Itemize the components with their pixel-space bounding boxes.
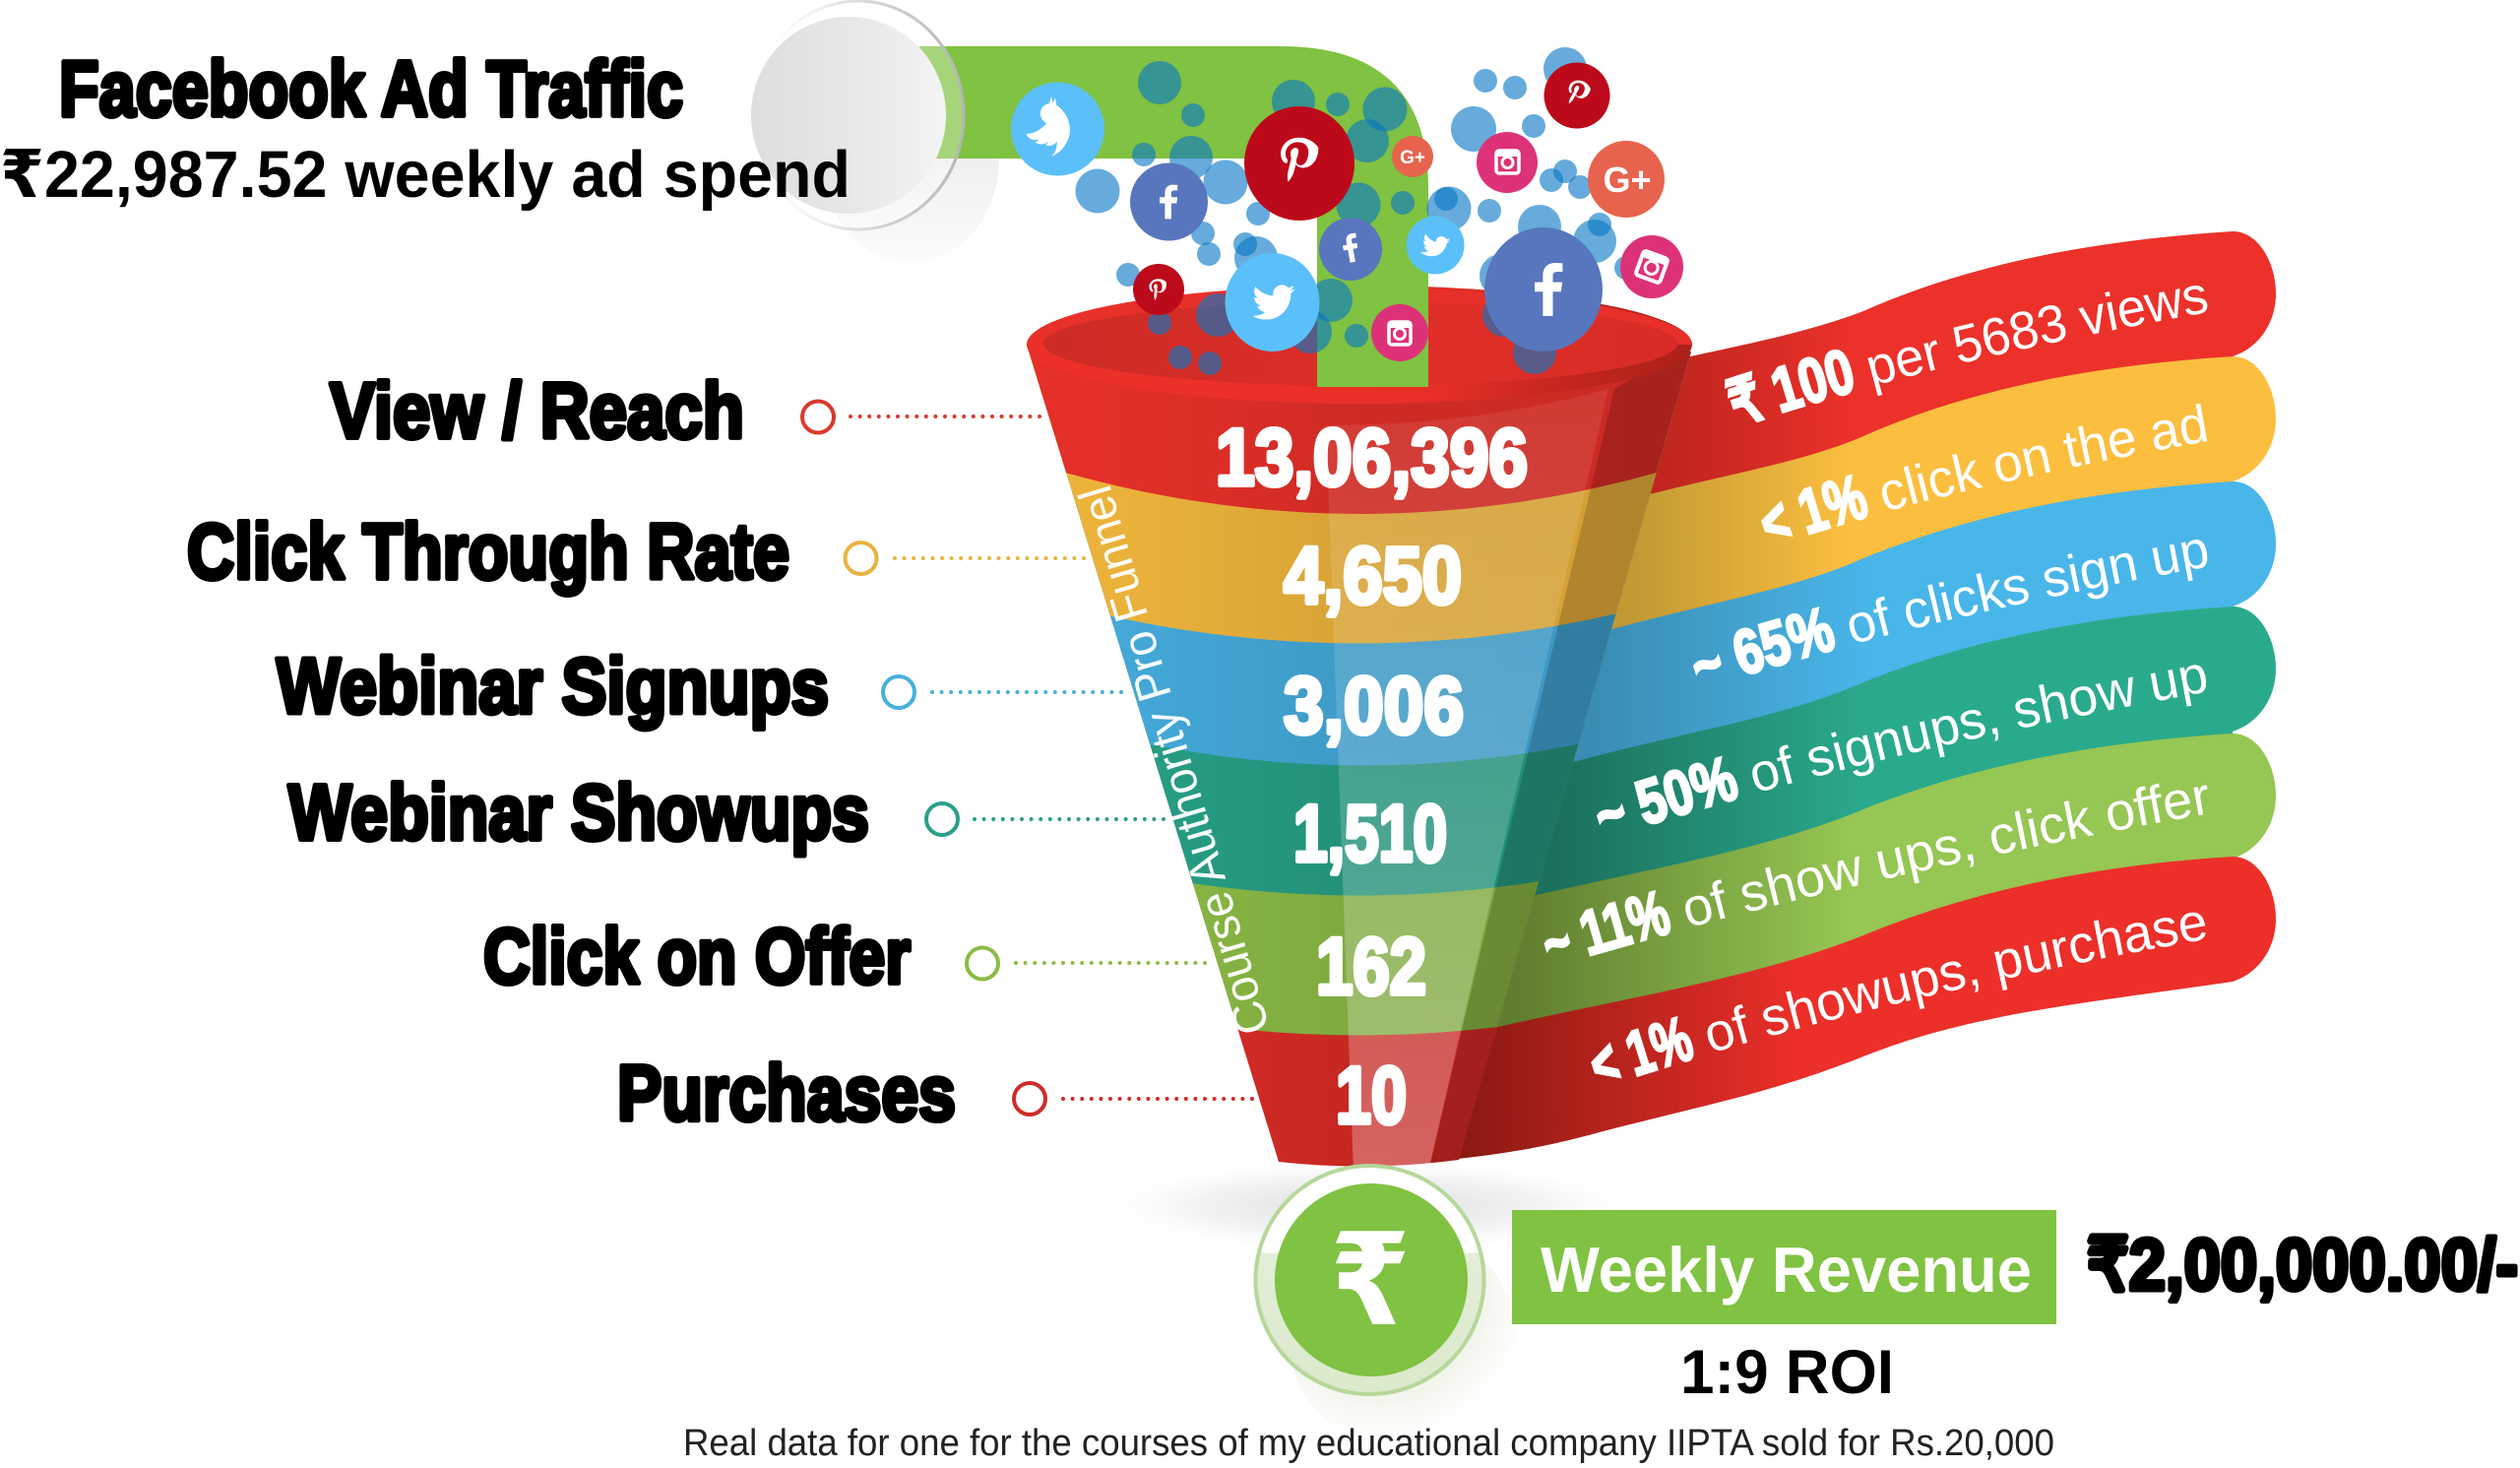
funnel rim xyxy=(1027,286,1692,404)
label: webinar signups: Webinar Signups xyxy=(277,642,829,730)
revenue coin xyxy=(1256,1166,1484,1394)
label: purchases: Purchases xyxy=(617,1050,956,1136)
rim outer xyxy=(1027,286,1692,404)
ribbon: offer click rate xyxy=(1477,734,2276,1044)
ribbon text: clicks sign up: ~ 65% of clicks sign up xyxy=(1693,540,2207,675)
ribbon texts xyxy=(1544,286,2207,1079)
rim inner xyxy=(1043,301,1677,386)
band: signups blue xyxy=(1028,351,1691,766)
ribbon: click rate xyxy=(1595,356,2276,645)
band: purchases red xyxy=(1028,351,1691,1166)
icon: twitter large left xyxy=(1011,83,1104,175)
connector: purchases xyxy=(1014,1083,1256,1115)
title: Facebook Ad Traffic xyxy=(59,45,683,132)
coin disc xyxy=(1275,1183,1468,1376)
number: clicks: 4,650 xyxy=(1284,532,1462,620)
ribbon: showup rate xyxy=(1516,606,2276,911)
badge box xyxy=(1512,1210,2056,1324)
band: click through yellow xyxy=(1028,351,1691,644)
ribbon text: show ups click offer: ~ 11% of show ups, click offer xyxy=(1544,784,2207,957)
label: view reach: View / Reach xyxy=(330,366,744,455)
icon: google plus small: G+ xyxy=(1400,148,1425,168)
icon: instagram right xyxy=(1620,235,1683,298)
band: showups teal xyxy=(1028,351,1691,896)
connector: view reach xyxy=(802,402,1045,433)
funnel right dark side xyxy=(1428,335,1703,1172)
connector: click through xyxy=(845,543,1089,574)
ribbon text: showups purchase: < 1% of showups, purchase xyxy=(1591,912,2206,1079)
ROI: 1:9 ROI xyxy=(1680,1338,1894,1407)
shadow: pipe cap xyxy=(822,56,999,263)
stage labels xyxy=(187,366,956,1136)
icon: twitter small xyxy=(1406,217,1465,274)
icon: pinterest large xyxy=(1244,106,1354,221)
label: webinar showups: Webinar Showups xyxy=(288,768,869,857)
icon: google plus large xyxy=(1588,141,1665,218)
number: showups: 1,510 xyxy=(1293,790,1447,878)
number: signups: 3,006 xyxy=(1284,662,1464,750)
band: click on offer green xyxy=(1028,351,1691,1036)
coin ring xyxy=(1256,1166,1484,1394)
label: click on offer: Click on Offer xyxy=(483,912,911,1000)
ribbon text: cost per views: ₹ 100 per 5683 views xyxy=(1725,286,2207,423)
glass ring xyxy=(753,1,964,229)
pipe cap xyxy=(751,1,964,229)
badge text: Weekly Revenue xyxy=(1541,1234,2032,1306)
funnel body xyxy=(1027,345,1691,1166)
shadow: revenue coin xyxy=(1290,1226,1516,1452)
icon: google plus small xyxy=(1392,136,1433,177)
subtitle: weekly ad spend: ₹22,987.52 weekly ad spend xyxy=(0,138,850,212)
icon: facebook large xyxy=(1484,227,1603,351)
number: offer clicks: 162 xyxy=(1316,922,1426,1012)
floating bubbles xyxy=(1075,47,1638,375)
ribbons: conversion rates xyxy=(1447,231,2276,1160)
icon: twitter large bottom xyxy=(1225,253,1319,351)
number: purchases: 10 xyxy=(1336,1052,1407,1140)
green traffic pipe xyxy=(919,46,1428,387)
ribbon: purchase rate xyxy=(1447,857,2276,1160)
funnel shading xyxy=(1175,351,1691,1166)
icon: pinterest top right xyxy=(1544,63,1610,128)
funnel glass highlight xyxy=(1326,389,1608,1172)
shadow: funnel base xyxy=(1083,1157,1654,1255)
icon: pinterest small xyxy=(1133,264,1184,315)
cap disc xyxy=(751,17,946,214)
band: view reach red xyxy=(1027,345,1691,514)
label: click through rate: Click Through Rate xyxy=(187,508,789,595)
icon: facebook mid xyxy=(1319,218,1382,281)
icon: instagram top right xyxy=(1477,132,1538,193)
funnel numbers xyxy=(1216,414,1528,1140)
ribbon: signup rate xyxy=(1555,481,2276,778)
rim back half xyxy=(1027,288,1692,345)
ribbon text: signups show up: ~ 50% of signups, show up xyxy=(1597,665,2207,825)
number: reach: 13,06,396 xyxy=(1216,414,1528,502)
ribbon: views cost xyxy=(1634,231,2276,512)
ribbon text: click on the ad: < 1% click on the ad xyxy=(1761,404,2207,538)
funnel side text: Course Authority Pro Funnel xyxy=(1070,479,1281,1041)
icon: instagram bottom xyxy=(1371,304,1428,361)
icon: google plus large: G+ xyxy=(1603,160,1652,200)
icon: rupee: ₹ xyxy=(1330,1208,1411,1352)
connector: offer xyxy=(967,947,1209,979)
footnote: Real data for one for the courses of my educational company IIPTA sold for Rs.20,000 xyxy=(683,1423,2054,1464)
connector: showups xyxy=(926,803,1168,835)
weekly revenue badge xyxy=(1512,1210,2056,1324)
connector: signups xyxy=(883,676,1126,708)
icon: facebook left xyxy=(1130,163,1208,240)
